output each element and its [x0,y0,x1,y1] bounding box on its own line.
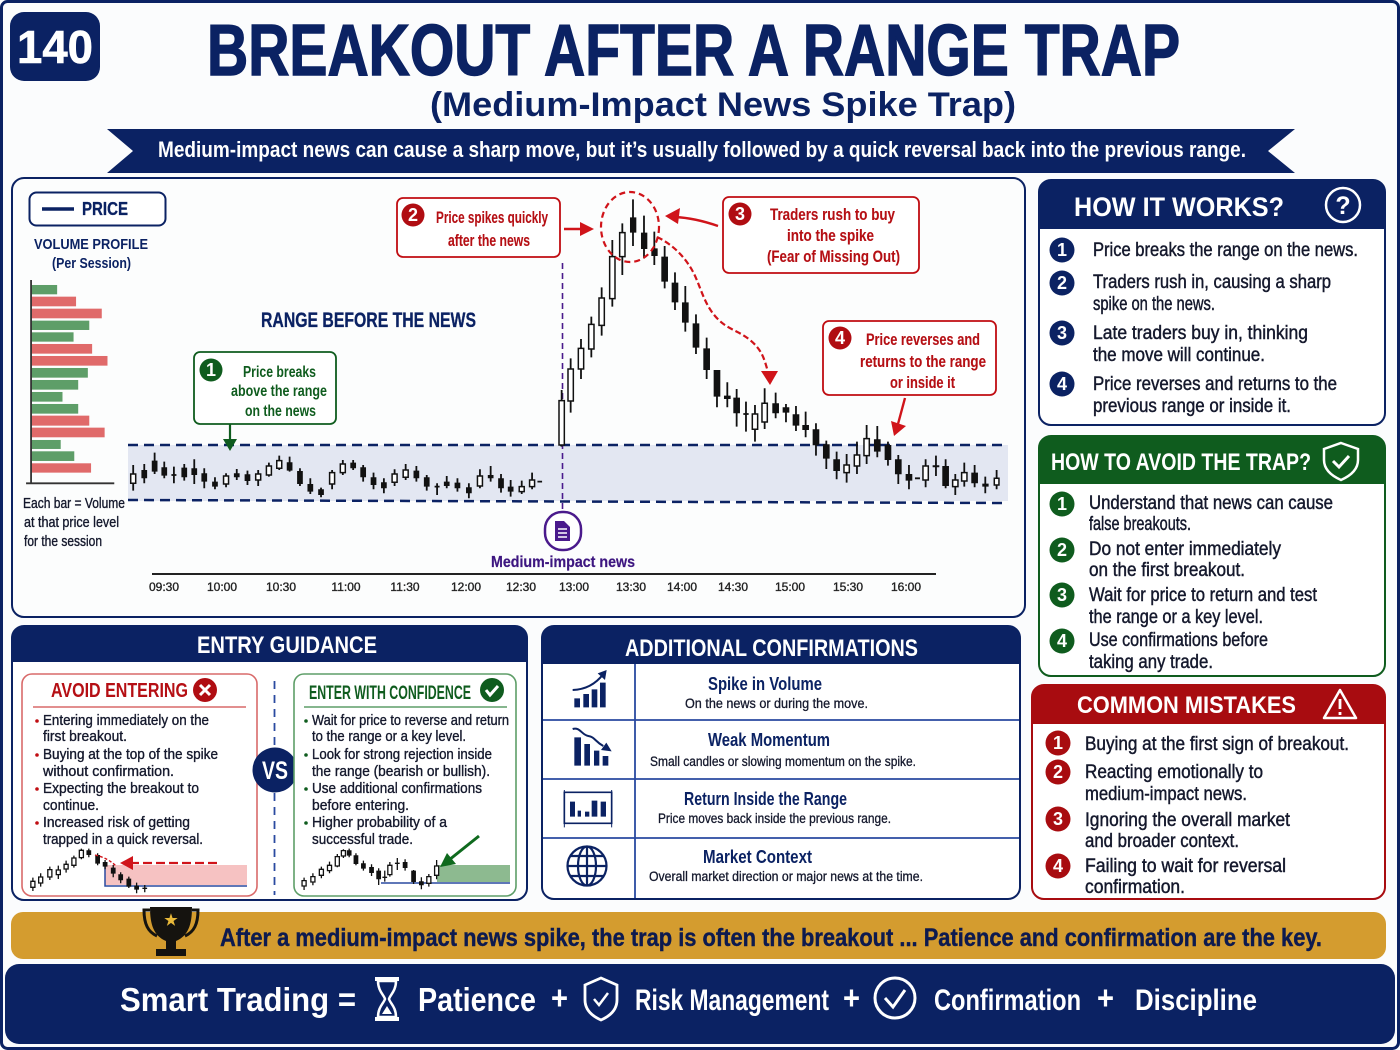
list: avoid steps: Understand that news can cause [1089,493,1333,514]
list: avoid bullets: first breakout. [43,729,127,745]
icon: trophy [144,907,198,956]
footer: smart trading formula: + [843,979,860,1016]
callout 2: price spikes quickly: after the news [448,231,530,250]
time axis: 10:00 [207,580,237,594]
row: market context: Market Context [703,847,812,867]
list: avoid steps: Do not enter immediately [1089,539,1281,560]
divider: vs: VS [262,757,288,785]
callout 1: price breaks above the range: on the news [245,403,316,420]
header: entry guidance [12,626,527,662]
heading: volume profile: VOLUME PROFILE [34,236,148,253]
time axis: 15:00 [775,580,805,594]
card: avoid entering: AVOID ENTERING [51,680,188,702]
time axis: 10:30 [266,580,296,594]
callout 1: price breaks above the range: 1 [206,360,216,380]
list: enter bullets: Wait for price to reverse and return [312,713,509,729]
list: mistakes: Buying at the first sign of breakout. [1085,734,1349,755]
time axis: 09:30 [149,580,179,594]
list: how it works steps: 1 [1057,240,1067,260]
callout 3: traders rush to buy [723,197,919,273]
footer: smart trading formula: Discipline [1135,984,1257,1017]
list: avoid bullets: without confirmation. [42,764,174,780]
list: avoid steps: on the first breakout. [1089,560,1245,581]
arrow: dashed reversal path [657,237,778,385]
arrow: callout 2 to spike [564,222,594,236]
list: mistakes: Ignoring the overall market [1085,810,1291,831]
divider: vs [252,681,298,895]
row: return inside the range: Return Inside the Range [684,789,847,809]
list: mistakes: 1 [1053,733,1063,753]
ribbon: summary [107,129,1295,173]
header: how to avoid the trap: HOW TO AVOID THE TRAP? [1051,449,1311,476]
callout 4: price reverses and returns [823,321,996,395]
row: market context: Overall market direction or major news at the time. [649,869,923,884]
list: how it works steps: Late traders buy in, thinking [1093,323,1308,344]
list: avoid bullets: Expecting the breakout to [43,781,199,797]
list: avoid steps: 4 [1057,631,1067,651]
card: enter with confidence [294,674,516,896]
subtitle: (Medium-Impact News Spike Trap) [430,86,1016,124]
row: weak momentum: Small candles or slowing momentum on the spike. [650,754,916,769]
list: how it works steps: 3 [1057,323,1067,343]
list: avoid steps: 1 [1057,494,1067,514]
list: enter bullets: successful trade. [312,832,413,848]
list: enter bullets: Higher probability of a [312,815,448,831]
list: mistakes: medium-impact news. [1085,784,1247,805]
icon: falling bars [573,729,612,766]
callout 4: price reverses and returns: or inside it [890,373,955,392]
footer: smart trading formula: Confirmation [934,984,1081,1017]
list: avoid steps: false breakouts. [1089,514,1191,535]
header: entry guidance: ENTRY GUIDANCE [197,632,377,659]
range band [128,445,1008,503]
list: how it works steps: the move will continue. [1093,345,1265,366]
footer: smart trading formula: Smart Trading = [120,981,356,1018]
time axis: 14:30 [718,580,748,594]
list: how it works steps: previous range or inside it. [1093,396,1291,417]
header: common mistakes [1032,685,1385,724]
ribbon: summary: Medium-impact news can cause a sharp move, but it’s usually followed by a quick reversal back into the previous range. [158,137,1246,162]
list: enter bullets: before entering. [312,798,409,814]
arrow: callout 3 to spike [665,208,718,226]
heading: volume profile [34,236,148,272]
time axis: 14:00 [667,580,697,594]
mini chart: trapped breakout [31,849,247,893]
list: avoid bullets: Buying at the top of the spike [43,747,218,763]
callout 1: price breaks above the range: Price breaks [243,364,316,381]
header: additional confirmations [542,626,1020,664]
time axis [149,574,936,594]
header: how it works: HOW IT WORKS? [1074,192,1284,222]
note: volume bar meaning: for the session [24,534,102,550]
header: how to avoid the trap [1039,436,1385,484]
footer: smart trading formula: Risk Management [635,984,829,1017]
row: weak momentum: Weak Momentum [708,730,830,750]
callout 2: price spikes quickly: Price spikes quickly [436,208,548,227]
list: how it works steps: 4 [1057,374,1067,394]
list: mistakes: confirmation. [1085,877,1185,898]
banner: key takeaway [11,907,1386,959]
mini chart: confirmed entry [302,836,510,890]
callout 3: traders rush to buy: into the spike [787,226,874,245]
arrow: callout 1 to range [223,424,237,451]
list: avoid bullets: continue. [43,798,99,814]
icon: check [480,678,504,702]
list: enter bullets: Use additional confirmations [312,781,482,797]
panel: common mistakes [1032,685,1385,899]
row: return inside the range [564,789,891,827]
list: avoid bullets: trapped in a quick reversal. [43,832,203,848]
callout 2: price spikes quickly [397,198,560,257]
icon: rising bars [573,670,607,707]
list: avoid bullets: Entering immediately on the [43,713,209,729]
list: mistakes: 4 [1053,856,1063,876]
callout 4: price reverses and returns: 4 [835,328,845,348]
list: how it works steps [1050,238,1358,417]
footer: smart trading formula: Patience [418,981,536,1018]
heading: volume profile: (Per Session) [52,255,131,272]
list: enter bullets [304,713,509,848]
card: enter with confidence: ENTER WITH CONFIDENCE [309,683,471,704]
callout 3: traders rush to buy: Traders rush to buy [770,205,895,224]
row: spike in volume: Spike in Volume [708,674,822,694]
icon: check circle [875,978,915,1018]
time axis: 13:30 [616,580,646,594]
icon: trophy: ★ [164,912,178,929]
legend: price: PRICE [82,199,128,219]
candles: spike, reversal and return [559,199,999,495]
time axis: 12:00 [451,580,481,594]
list: enter bullets: the range (bearish or bullish). [312,764,490,780]
list: avoid bullets [35,713,218,848]
note: volume bar meaning [23,496,125,550]
panel: price chart [12,178,1025,617]
list: how it works steps: Price breaks the range on the news. [1093,240,1358,261]
label: medium-impact news: Medium-impact news [491,554,635,571]
badge: number 140 [10,12,100,81]
highlight: spike circle [601,192,659,262]
list: mistakes: and broader context. [1085,831,1239,852]
news marker line [562,263,564,512]
callout 1: price breaks above the range: above the range [231,383,327,400]
list: avoid bullets: Increased risk of getting [43,815,190,831]
header: common mistakes: COMMON MISTAKES [1077,692,1296,719]
time axis: 15:30 [833,580,863,594]
chart: volume profile bars [26,280,114,483]
list: mistakes [1046,730,1349,898]
card: avoid entering [22,674,257,896]
header: how it works [1039,180,1385,229]
time axis: 11:00 [331,580,361,594]
row: spike in volume: On the news or during the move. [685,696,868,711]
row: spike in volume [573,670,868,711]
footer: smart trading formula: + [1097,979,1114,1016]
icon: globe [568,846,606,886]
legend: price [30,192,166,226]
time axis: 12:30 [506,580,536,594]
time axis: 13:00 [559,580,589,594]
panel: how to avoid the trap [1039,436,1385,676]
icon: news document [545,512,581,550]
list: enter bullets: to the range or a key level. [312,729,466,745]
list: enter bullets: Look for strong rejection inside [312,747,492,763]
badge: number 140: 140 [17,21,93,73]
icon: cross [193,678,217,702]
list: avoid steps: 3 [1057,585,1067,605]
callout 3: traders rush to buy: 3 [735,204,745,224]
list: mistakes: 2 [1053,762,1063,782]
row: return inside the range: Price moves back inside the previous range. [658,811,891,826]
time axis: 16:00 [891,580,921,594]
callout 3: traders rush to buy: (Fear of Missing Out) [767,247,900,266]
note: volume bar meaning: at that price level [24,515,119,531]
arrow: callout 4 to range [891,398,906,436]
label: range before the news: RANGE BEFORE THE NEWS [261,309,476,332]
list: avoid steps: taking any trade. [1089,652,1213,673]
row: market context [568,846,923,886]
footer: smart trading formula: + [551,979,568,1016]
panel: additional confirmations [542,626,1020,899]
callout 2: price spikes quickly: 2 [408,205,418,225]
row: weak momentum [573,729,916,769]
icon: hourglass [375,979,399,1019]
list: avoid steps: the range or a key level. [1089,607,1263,628]
list: mistakes: Failing to wait for reversal [1085,856,1286,877]
list: how it works steps: spike on the news. [1093,294,1215,315]
list: avoid steps: Use confirmations before [1089,630,1268,651]
callout 4: price reverses and returns: Price reverses and [866,330,980,349]
panel: how it works [1039,180,1385,425]
title: BREAKOUT AFTER A RANGE TRAP [207,11,1180,91]
time axis: 11:30 [390,580,420,594]
list: mistakes: Reacting emotionally to [1085,762,1263,783]
list: how it works steps: Traders rush in, causing a sharp [1093,272,1331,293]
list: avoid steps [1050,492,1333,673]
note: volume bar meaning: Each bar = Volume [23,496,125,512]
list: avoid steps: 2 [1057,540,1067,560]
list: mistakes: 3 [1053,809,1063,829]
icon: shield [585,978,617,1020]
list: avoid steps: Wait for price to return and test [1089,585,1318,606]
header: how it works: ? [1335,192,1351,220]
candles: before the news [131,453,542,498]
callout 1: price breaks above the range [194,352,336,424]
callout 4: price reverses and returns: returns to the range [860,352,986,371]
footer: smart trading formula [5,964,1395,1044]
list: how it works steps: 2 [1057,273,1067,293]
icon: framed bars [564,790,612,827]
list: how it works steps: Price reverses and returns to the [1093,374,1337,395]
panel: entry guidance [12,626,527,900]
header: additional confirmations: ADDITIONAL CONFIRMATIONS [625,635,918,662]
